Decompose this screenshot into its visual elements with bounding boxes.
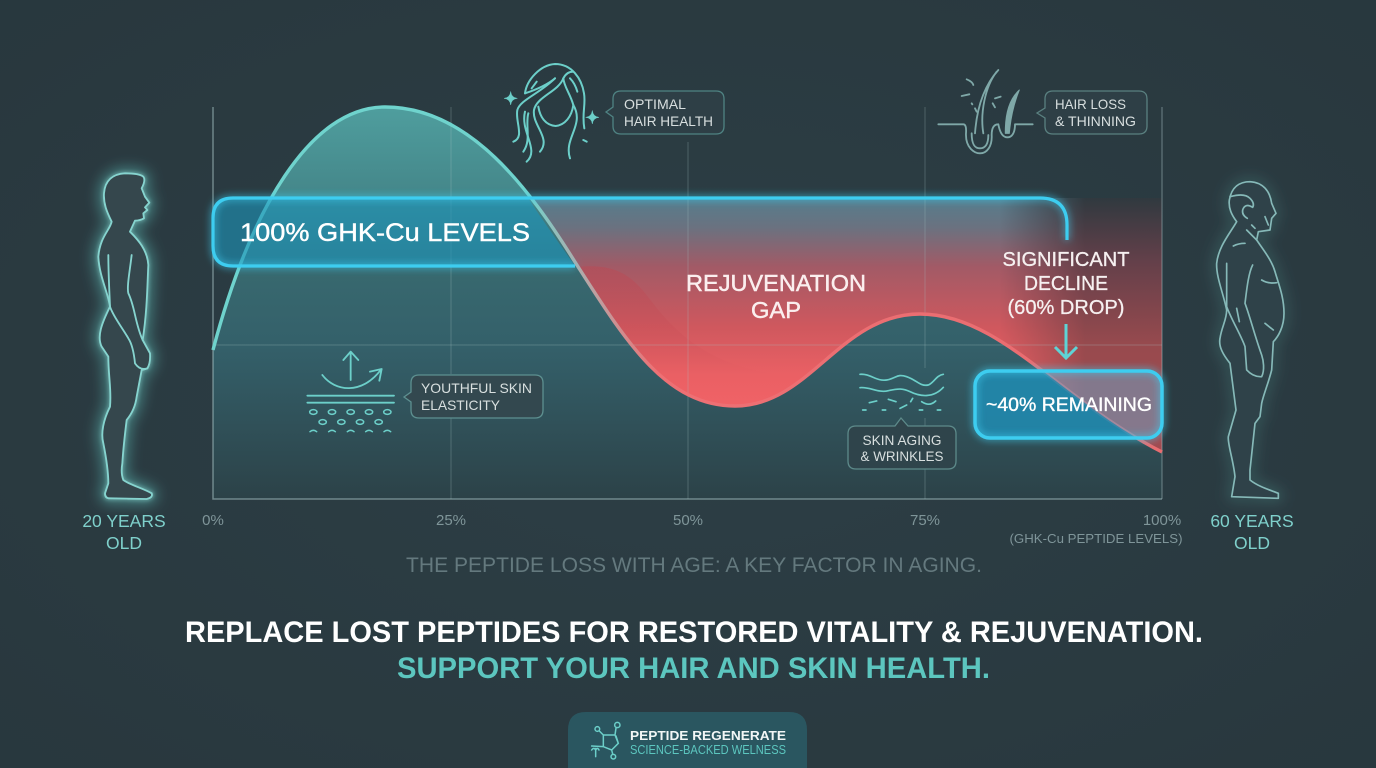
axis labels: 50% bbox=[673, 512, 703, 529]
label: rejuvenation gap bbox=[686, 270, 866, 323]
chart: peptide level curve bbox=[213, 107, 1162, 499]
callout: 40% remaining bbox=[975, 371, 1162, 438]
label: 60 years old: OLD bbox=[1234, 533, 1270, 553]
logo text: PEPTIDE REGENERATE bbox=[630, 728, 786, 743]
callout: hair loss and thinning: HAIR LOSS bbox=[1055, 96, 1126, 112]
label: rejuvenation gap: GAP bbox=[751, 297, 801, 323]
subheadline: SUPPORT YOUR HAIR AND SKIN HEALTH. bbox=[397, 652, 990, 685]
label: significant decline: SIGNIFICANT bbox=[1002, 249, 1130, 271]
callout: optimal hair health: OPTIMAL bbox=[624, 96, 686, 112]
icon: hair bbox=[504, 64, 599, 162]
icon: wrinkles bbox=[860, 374, 943, 410]
callout: skin aging and wrinkles: SKIN AGING bbox=[862, 432, 942, 448]
label: 20 years old: 20 YEARS bbox=[82, 511, 166, 531]
axis labels: 0% bbox=[202, 512, 224, 529]
red rejuvenation gap area bbox=[500, 198, 1162, 454]
arrow: decline bbox=[1055, 324, 1077, 358]
axes and grid bbox=[213, 107, 1162, 499]
axis labels bbox=[202, 512, 1182, 546]
callout band: 100% GHK-Cu levels bbox=[213, 198, 1067, 266]
icon: skin elasticity bbox=[307, 352, 394, 432]
figure: 20 years old bbox=[98, 173, 152, 499]
label: 60 years old: 60 YEARS bbox=[1210, 511, 1294, 531]
axis labels: (GHK-Cu PEPTIDE LEVELS) bbox=[1010, 531, 1182, 546]
callout: youthful skin elasticity: ELASTICITY bbox=[421, 397, 501, 413]
icon: hair follicle bbox=[938, 70, 1033, 153]
callout: skin aging and wrinkles bbox=[848, 418, 956, 469]
figure: 60 years old bbox=[1217, 182, 1284, 498]
chart caption: THE PEPTIDE LOSS WITH AGE: A KEY FACTOR IN AGING. bbox=[406, 554, 982, 577]
callout: youthful skin elasticity bbox=[404, 375, 543, 418]
axis labels: 100% bbox=[1143, 512, 1181, 529]
callout: hair loss and thinning bbox=[1037, 91, 1147, 134]
label: significant decline: DECLINE bbox=[1024, 273, 1108, 295]
curve line bbox=[213, 107, 1162, 452]
label: 20 years old bbox=[82, 511, 166, 553]
axis labels: 75% bbox=[910, 512, 940, 529]
callout: youthful skin elasticity: YOUTHFUL SKIN bbox=[421, 380, 532, 396]
icon: molecule bbox=[592, 722, 620, 759]
label: 40% remaining: ~40% REMAINING bbox=[986, 395, 1152, 416]
axis labels: 25% bbox=[436, 512, 466, 529]
label: 60 years old bbox=[1210, 511, 1294, 553]
label: significant decline: (60% DROP) bbox=[1008, 297, 1124, 319]
icon: sparkles bbox=[504, 92, 599, 124]
label: rejuvenation gap: REJUVENATION bbox=[686, 270, 866, 296]
logo badge bbox=[568, 712, 807, 768]
callout: optimal hair health: HAIR HEALTH bbox=[624, 113, 713, 129]
headline: REPLACE LOST PEPTIDES FOR RESTORED VITALITY & REJUVENATION. bbox=[185, 616, 1203, 649]
logo badge: SCIENCE-BACKED WELNESS bbox=[630, 743, 786, 757]
callout: skin aging and wrinkles: & WRINKLES bbox=[860, 448, 944, 464]
label: 20 years old: OLD bbox=[106, 533, 142, 553]
callout: hair loss and thinning: & THINNING bbox=[1055, 113, 1136, 129]
label: significant decline bbox=[1002, 249, 1130, 319]
callout: optimal hair health bbox=[606, 91, 724, 134]
label: 100% GHK-Cu levels: 100% GHK-Cu LEVELS bbox=[240, 219, 530, 247]
teal area under curve bbox=[213, 107, 1162, 499]
